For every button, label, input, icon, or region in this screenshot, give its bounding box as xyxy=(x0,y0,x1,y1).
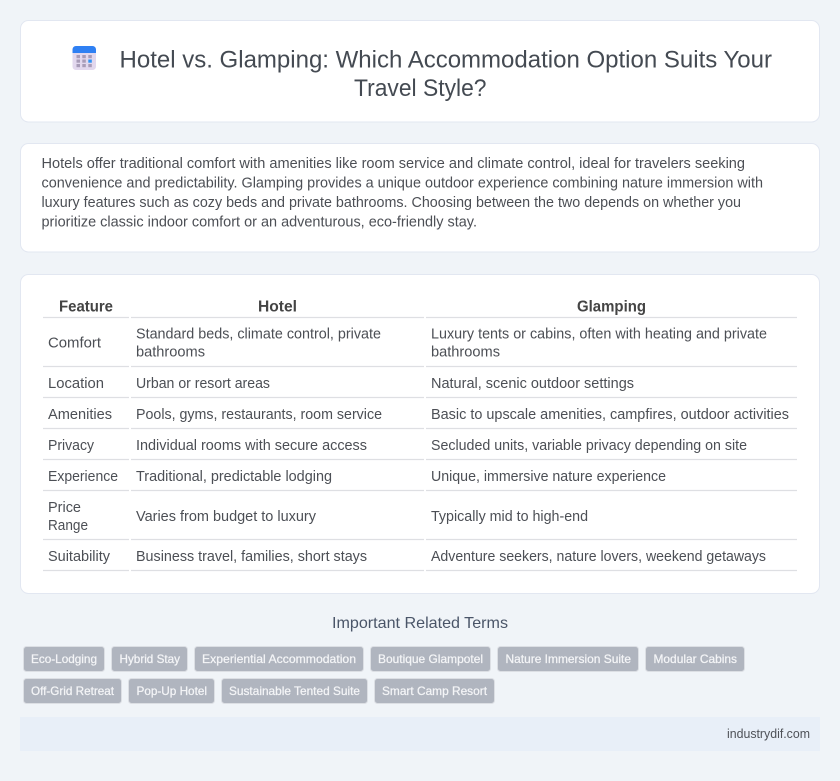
row: comfort: Comfort xyxy=(48,336,101,352)
tag: Modular Cabins: Modular Cabins xyxy=(654,652,737,666)
table header row: Glamping xyxy=(577,299,646,316)
row: location: Location xyxy=(48,376,104,392)
row: price range: Typically mid to high-end xyxy=(431,509,588,525)
related term tags xyxy=(24,646,744,704)
title xyxy=(120,46,772,102)
panel: comparison table xyxy=(20,274,820,594)
footer xyxy=(20,717,820,751)
row: privacy: Privacy xyxy=(48,438,95,454)
row: experience xyxy=(48,469,666,485)
row: comfort: Standard beds, climate control, private xyxy=(136,326,381,342)
tag: Eco-Lodging: Eco-Lodging xyxy=(31,652,97,666)
table header row xyxy=(59,299,646,316)
row: location: Urban or resort areas xyxy=(136,376,270,392)
panel: introduction xyxy=(20,144,820,252)
row: price range: Range xyxy=(48,518,88,534)
row: price range: Varies from budget to luxury xyxy=(136,509,317,525)
row: experience: Unique, immersive nature experience xyxy=(431,469,666,485)
footer: industrydif.com xyxy=(727,727,810,741)
tag: Off-Grid Retreat xyxy=(24,678,122,704)
row: location: Natural, scenic outdoor settings xyxy=(431,376,634,392)
intro text xyxy=(42,156,763,230)
row: experience: Experience xyxy=(48,469,118,485)
tag: Experiential Accommodation xyxy=(194,646,364,672)
row: comfort: bathrooms xyxy=(431,345,500,361)
row: experience: Traditional, predictable lodging xyxy=(136,469,332,485)
tag: Experiential Accommodation: Experiential Accommodation xyxy=(202,652,356,666)
intro text: prioritize classic indoor comfort or an adventurous, eco-friendly stay. xyxy=(42,214,477,230)
row: price range xyxy=(48,500,588,534)
row: amenities xyxy=(48,407,789,423)
tag: Modular Cabins xyxy=(646,646,744,672)
intro text: luxury features such as cozy beds and private bathrooms. Choosing between the two depends on whether you xyxy=(42,195,741,211)
row: comfort: Luxury tents or cabins, often with heating and private xyxy=(431,326,767,342)
tag: Boutique Glampotel: Boutique Glampotel xyxy=(378,652,483,666)
icon: calendar xyxy=(72,46,96,70)
heading: important related terms: Important Related Terms xyxy=(332,615,508,632)
tag: Nature Immersion Suite xyxy=(498,646,638,672)
tag: Nature Immersion Suite: Nature Immersion Suite xyxy=(506,652,631,666)
tag: Eco-Lodging xyxy=(24,646,104,672)
tag: Hybrid Stay xyxy=(112,646,188,672)
row: amenities: Basic to upscale amenities, campfires, outdoor activities xyxy=(431,407,789,423)
intro text: Hotels offer traditional comfort with amenities like room service and climate control, ideal for travelers seeking xyxy=(42,156,745,172)
row: amenities: Amenities xyxy=(48,407,112,423)
row: amenities: Pools, gyms, restaurants, room service xyxy=(136,407,382,423)
title: Hotel vs. Glamping: Which Accommodation Option Suits Your xyxy=(120,46,772,74)
row: comfort xyxy=(48,326,767,361)
table header row: Feature xyxy=(59,299,113,316)
row: suitability: Business travel, families, short stays xyxy=(136,549,367,565)
tag: Off-Grid Retreat: Off-Grid Retreat xyxy=(31,684,115,698)
tag: Boutique Glampotel xyxy=(370,646,490,672)
tag: Sustainable Tented Suite xyxy=(222,678,368,704)
tag: Pop-Up Hotel xyxy=(128,678,214,704)
row: suitability xyxy=(48,549,766,565)
tag: Pop-Up Hotel: Pop-Up Hotel xyxy=(136,684,207,698)
intro text: convenience and predictability. Glamping provides a unique outdoor experience combining nature immersion with xyxy=(42,176,763,192)
table header row: Hotel xyxy=(258,299,297,316)
row: location xyxy=(48,376,634,392)
panel: header xyxy=(20,20,820,122)
row: suitability: Adventure seekers, nature lovers, weekend getaways xyxy=(431,549,766,565)
title: Travel Style? xyxy=(354,75,486,102)
tag: Smart Camp Resort: Smart Camp Resort xyxy=(382,684,488,698)
tag: Smart Camp Resort xyxy=(374,678,494,704)
row: privacy: Individual rooms with secure access xyxy=(136,438,367,454)
row: suitability: Suitability xyxy=(48,549,111,565)
tag: Sustainable Tented Suite: Sustainable Tented Suite xyxy=(229,684,360,698)
tag: Hybrid Stay: Hybrid Stay xyxy=(120,652,180,666)
row: price range: Price xyxy=(48,500,81,516)
row: privacy: Secluded units, variable privacy depending on site xyxy=(431,438,747,454)
row: comfort: bathrooms xyxy=(136,345,205,361)
row: privacy xyxy=(48,438,747,454)
